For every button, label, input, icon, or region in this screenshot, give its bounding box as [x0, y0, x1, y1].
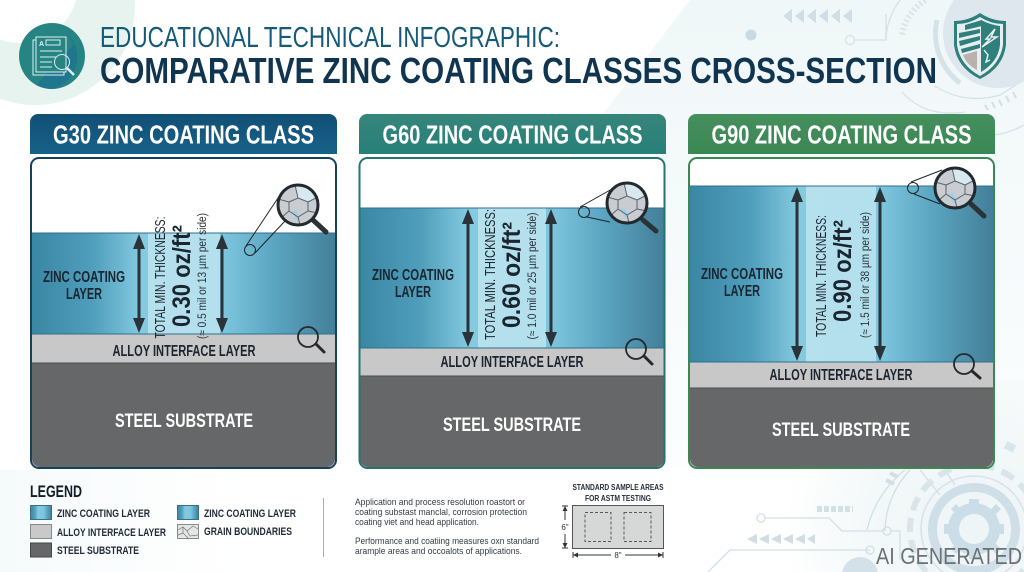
G30 alloy interface layer	[32, 334, 335, 363]
G60 steel label: STEEL SUBSTRATE	[443, 415, 581, 436]
G60 header	[359, 114, 666, 154]
6 inch dimension: 6"	[561, 523, 569, 532]
legend item: zinc: ZINC COATING LAYER	[57, 508, 150, 520]
G60 thickness note: (≈ 1.0 mil or 25 µm per side)	[527, 212, 539, 340]
G30 small magnifier	[298, 327, 324, 352]
G30 arrow left	[133, 234, 145, 333]
G90 small magnifier	[954, 354, 980, 378]
sample area diagram	[561, 483, 664, 560]
G30 arrow right	[216, 234, 228, 333]
icon: document with magnifier: A	[39, 41, 44, 48]
G90 alloy interface layer	[690, 362, 993, 388]
G90 thickness label: TOTAL MIN. THICKNESS:	[814, 215, 830, 337]
G90 steel substrate	[690, 388, 993, 468]
description text: coating viet and head application.	[355, 517, 479, 528]
G30 thickness label: TOTAL MIN. THICKNESS:	[153, 216, 169, 338]
description text: arample areas and occoalots of applications.	[355, 546, 522, 557]
title line 1: EDUCATIONAL TECHNICAL INFOGRAPHIC:	[100, 22, 560, 54]
legend item: zinc dark: ZINC COATING LAYER	[204, 508, 296, 520]
G60 zinc label: LAYER	[395, 284, 431, 301]
G60 arrow left	[462, 209, 474, 347]
G60 alloy label: ALLOY INTERFACE LAYER	[440, 354, 584, 371]
legend item: steel	[30, 543, 139, 557]
G30 header: G30 ZINC COATING CLASS	[53, 122, 314, 150]
G30 alloy label: ALLOY INTERFACE LAYER	[112, 343, 256, 360]
icon: document with magnifier	[19, 23, 85, 89]
legend item: zinc	[30, 506, 150, 520]
legend item: grain boundaries: GRAIN BOUNDARIES	[204, 526, 292, 538]
G90 grain magnifier	[908, 168, 984, 216]
G90 header	[688, 114, 995, 154]
G90 zinc coating layer	[690, 186, 993, 362]
8 inch dimension: 8"	[614, 551, 622, 560]
sample heading: FOR ASTM TESTING	[585, 494, 651, 503]
G60 steel substrate	[360, 376, 664, 468]
sample heading: STANDARD SAMPLE AREAS	[572, 483, 664, 492]
G60 header: G60 ZINC COATING CLASS	[382, 122, 642, 150]
G30 cross-section	[32, 232, 335, 467]
panel: G30	[30, 114, 337, 468]
legend item: alloy: ALLOY INTERFACE LAYER	[57, 527, 166, 539]
G60 thickness value: 0.60 oz/ft²	[498, 222, 526, 328]
G60 zinc coating layer	[360, 208, 664, 348]
G30 zinc label: ZINC COATING	[43, 269, 125, 286]
G60 arrow right	[545, 209, 557, 347]
G90 alloy label: ALLOY INTERFACE LAYER	[770, 367, 913, 384]
legend item: steel: STEEL SUBSTRATE	[57, 545, 139, 557]
legend item: grain boundaries	[178, 524, 292, 538]
G90 thickness value: 0.90 oz/ft²	[829, 220, 857, 322]
icon: shield	[935, 0, 1024, 88]
G30 steel label: STEEL SUBSTRATE	[115, 411, 253, 432]
G30 thickness value: 0.30 oz/ft²	[168, 225, 196, 327]
G30 grain magnifier	[244, 185, 326, 256]
legend item: alloy	[30, 524, 166, 539]
G60 small magnifier	[626, 339, 652, 364]
description text: Performance and coatiing measures oxn standard	[355, 536, 539, 547]
G90 steel label: STEEL SUBSTRATE	[772, 420, 910, 441]
G30 zinc label: LAYER	[66, 286, 102, 303]
G90 thickness note: (≈ 1.5 mil or 38 µm per side)	[860, 212, 872, 338]
panel: G60	[359, 114, 666, 468]
G30 zinc coating layer	[32, 233, 335, 334]
G60 cross-section	[360, 159, 664, 468]
G60 grain magnifier	[578, 183, 656, 231]
G90 zinc label: LAYER	[724, 283, 760, 300]
sample squares	[585, 512, 651, 542]
G30 header	[30, 114, 337, 154]
legend item: zinc dark	[178, 506, 296, 520]
panel: G90	[688, 114, 995, 468]
title	[100, 22, 937, 91]
description text: Application and process resolution roastort or	[355, 497, 525, 508]
description text: coating substast manclal, corrosion protection	[355, 507, 527, 518]
legend	[30, 482, 296, 557]
G30 steel substrate	[32, 363, 335, 468]
G60 zinc label: ZINC COATING	[372, 267, 454, 284]
sample plate	[572, 506, 664, 548]
description text	[355, 497, 539, 557]
G60 thickness label: TOTAL MIN. THICKNESS:	[483, 209, 499, 340]
decorative gear and circuitry, bottom right	[708, 441, 1024, 572]
legend heading: LEGEND	[30, 482, 82, 501]
G60 alloy interface layer	[360, 348, 664, 376]
G90 zinc label: ZINC COATING	[701, 266, 783, 283]
G90 arrow left	[791, 187, 803, 361]
G90 arrow right	[874, 187, 886, 361]
G30 thickness note: (≈ 0.5 mil or 13 µm per side)	[197, 213, 209, 339]
G90 cross-section	[690, 159, 993, 468]
